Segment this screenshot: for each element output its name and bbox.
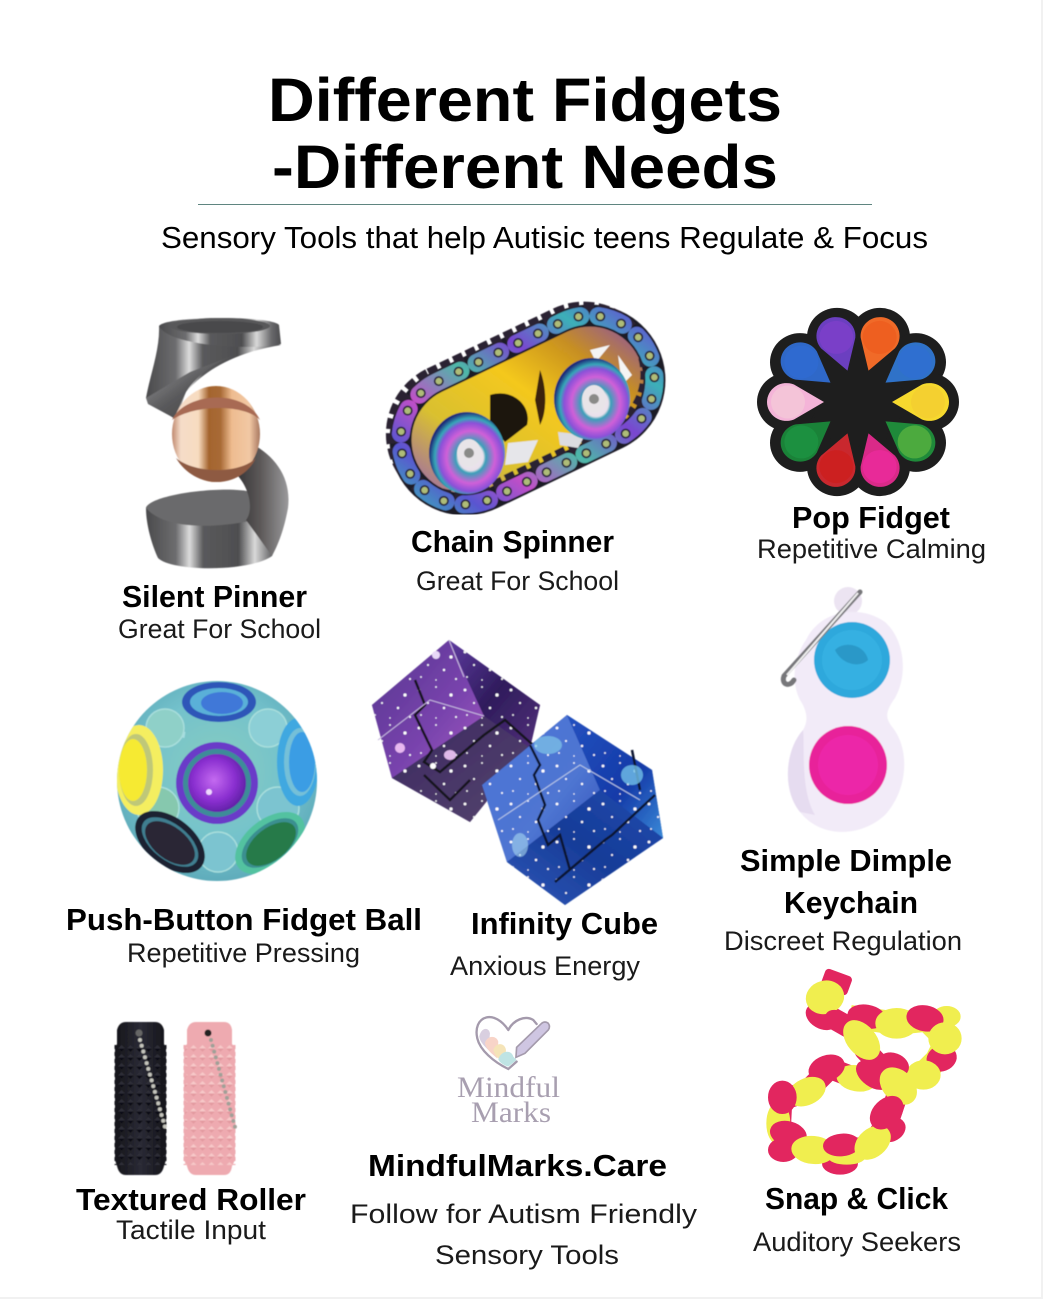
icon: fidget ball (115, 681, 319, 887)
icon: pop fidget (757, 308, 959, 496)
sublabel: great for school: Great For School (118, 614, 321, 644)
icon: silent spinner (146, 318, 289, 568)
icon: blue infinity cube (482, 715, 663, 905)
title: Different Fidgets (268, 66, 782, 134)
label: push-button fidget ball: Push-Button Fidget Ball (66, 902, 422, 937)
panel: snap and click (753, 968, 961, 1257)
title: -Different Needs (272, 133, 778, 201)
sublabel: follow for autism friendly sensory tools: Follow for Autism Friendly (350, 1199, 698, 1229)
icon: simple dimple keychain (783, 587, 904, 832)
sublabel: follow for autism friendly sensory tools (350, 1199, 698, 1270)
label: infinity cube: Infinity Cube (471, 906, 658, 941)
label: chain spinner: Chain Spinner (411, 524, 614, 559)
panel: infinity cube (372, 640, 663, 981)
label: textured roller: Textured Roller (76, 1182, 306, 1217)
icon: chain spinner (394, 310, 654, 504)
panel: silent spinner (118, 318, 321, 644)
panel: chain spinner (394, 310, 654, 596)
label: simple dimple keychain (740, 843, 952, 920)
sublabel: anxious energy: Anxious Energy (450, 951, 640, 981)
label: simple dimple keychain: Simple Dimple (740, 843, 952, 878)
sublabel: great for school: Great For School (416, 566, 619, 596)
label: snap and click: Snap & Click (765, 1181, 949, 1216)
panel: textured roller (76, 1022, 306, 1245)
label: mindfulmarks.care: MindfulMarks.Care (368, 1148, 667, 1183)
title rule (198, 204, 872, 205)
label: silent pinner: Silent Pinner (122, 579, 307, 614)
panel: push-button fidget ball (66, 681, 422, 968)
icon: mindful marks logo: Marks (471, 1096, 551, 1129)
sublabel: follow for autism friendly sensory tools: Sensory Tools (435, 1240, 619, 1270)
icon: snap and click chain (768, 968, 960, 1173)
icon: mindful marks logo (457, 1017, 560, 1129)
sublabel: repetitive pressing: Repetitive Pressing (127, 938, 360, 968)
panel: mindful marks promo (350, 1017, 698, 1270)
icon: pink roller (184, 1022, 235, 1175)
sublabel: tactile input: Tactile Input (116, 1215, 267, 1245)
icon: mindful marks logo: Mindful (457, 1071, 560, 1104)
title (268, 66, 782, 201)
panel: pop fidget (757, 308, 986, 564)
panel: simple dimple keychain (724, 587, 962, 956)
icon: purple infinity cube (372, 640, 540, 822)
label: pop fidget: Pop Fidget (792, 500, 950, 535)
subtitle: Sensory Tools that help Autisic teens Regulate & Focus (161, 220, 928, 255)
icon: black roller (115, 1022, 166, 1175)
sublabel: auditory seekers: Auditory Seekers (753, 1227, 961, 1257)
sublabel: repetitive calming: Repetitive Calming (757, 534, 986, 564)
label: simple dimple keychain: Keychain (784, 885, 918, 920)
sublabel: discreet regulation: Discreet Regulation (724, 926, 962, 956)
